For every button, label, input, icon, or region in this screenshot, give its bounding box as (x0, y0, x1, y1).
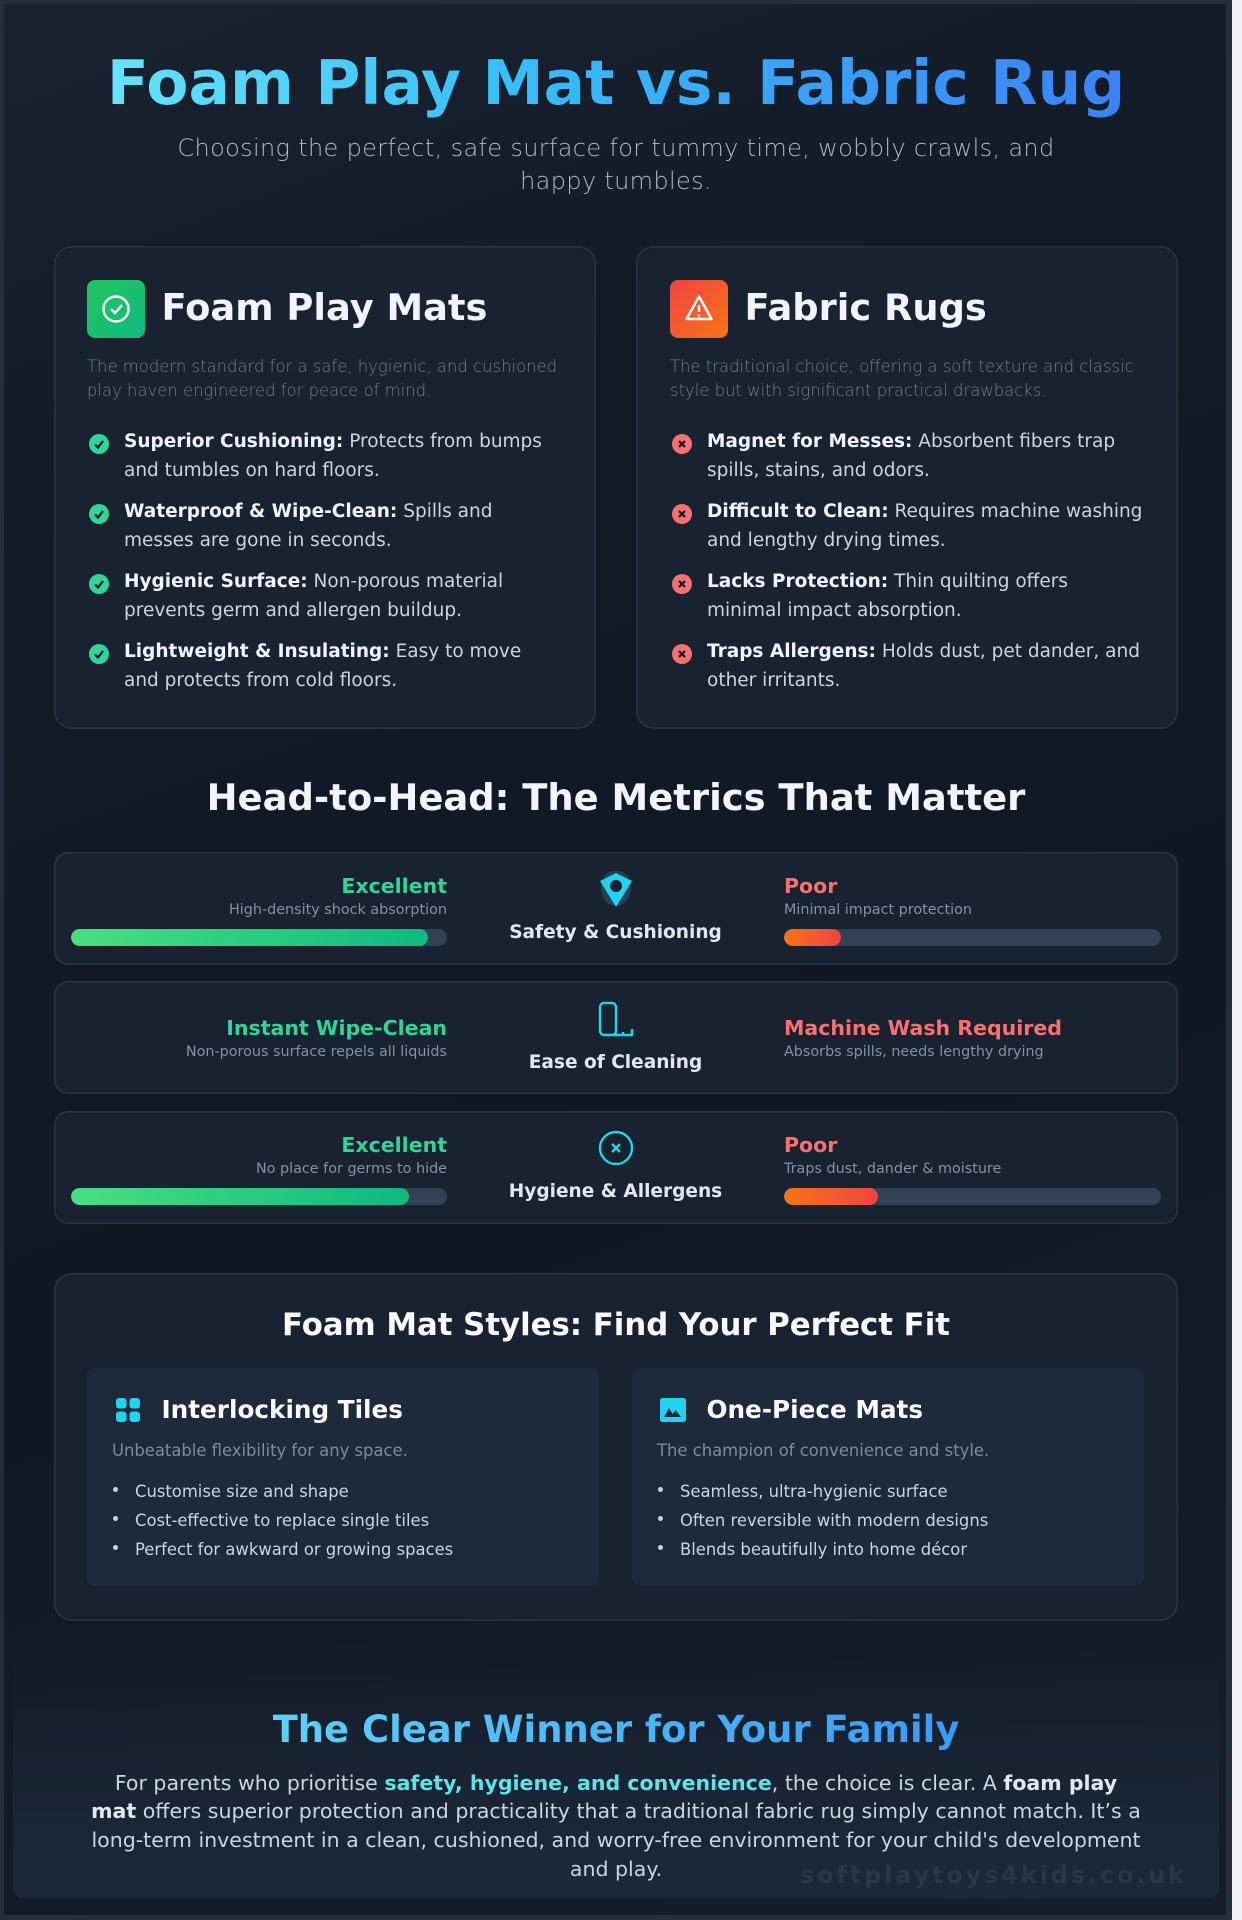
drawback: magnet for messes: spills, stains, and odors. (707, 460, 930, 481)
drawback: difficult to clean (672, 501, 1142, 551)
style title: One-Piece Mats (706, 1395, 923, 1424)
description: style but with significant practical drawbacks. (670, 381, 1047, 400)
icon: picture (660, 1398, 686, 1422)
foam bar (71, 1188, 447, 1205)
drawback: magnet for messes (672, 431, 1115, 481)
heading: styles: Foam Mat Styles: Find Your Perfect Fit (282, 1307, 950, 1343)
rug rating: Poor (784, 874, 837, 898)
metric row: safety and cushioning (54, 852, 1178, 965)
style feature list (680, 1482, 988, 1559)
panel: conclusion background (13, 1640, 1219, 1898)
drawback: traps allergens: other irritants. (707, 670, 840, 691)
metric row: ease of cleaning (54, 981, 1178, 1094)
heading: head-to-head: Head-to-Head: The Metrics That Matter (207, 776, 1025, 819)
benefit: waterproof (89, 501, 492, 551)
heading: conclusion: The Clear Winner for Your Family (273, 1708, 959, 1751)
style title: Interlocking Tiles (162, 1395, 403, 1424)
style bullet markers (658, 1487, 663, 1550)
conclusion text: For parents who prioritise safety, hygiene, and convenience, the choice is clear. A foam play (115, 1770, 1117, 1794)
icon: shield (600, 871, 632, 907)
style feature list (135, 1482, 453, 1559)
description: play haven engineered for peace of mind. (87, 381, 431, 400)
heading: fabric rugs: Fabric Rugs (744, 286, 987, 329)
description (670, 357, 1134, 400)
rug detail: Minimal impact protection (784, 902, 972, 918)
style feature list: Perfect for awkward or growing spaces (135, 1540, 453, 1559)
metric row: hygiene and allergens (54, 1111, 1178, 1224)
rug detail: Traps dust, dander & moisture (784, 1161, 1001, 1177)
watermark: softplaytoys4kids.co.uk (800, 1861, 1187, 1889)
drawback: traps allergens: Traps Allergens: Holds dust, pet dander, and (707, 641, 1140, 662)
subtitle: happy tumbles. (520, 167, 712, 195)
description: The modern standard for a safe, hygienic, and cushioned (87, 357, 557, 376)
drawback: magnet for messes: Magnet for Messes: Absorbent fibers trap (707, 431, 1115, 452)
metric label: Hygiene & Allergens (509, 1181, 722, 1202)
benefit: superior cushioning: Superior Cushioning: Protects from bumps (124, 431, 542, 452)
conclusion text: and play. (570, 1857, 662, 1881)
benefit: waterproof: messes are gone in seconds. (124, 530, 392, 551)
rug rating: Machine Wash Required (784, 1016, 1062, 1040)
benefit: lightweight (89, 641, 521, 691)
subtitle (177, 134, 1055, 195)
metric label: Safety & Cushioning (509, 922, 722, 943)
style description: Unbeatable flexibility for any space. (112, 1441, 408, 1460)
description: The traditional choice, offering a soft texture and classic (670, 357, 1134, 376)
benefit: superior cushioning (89, 431, 542, 481)
sub-panel: one-piece mats (632, 1368, 1144, 1586)
style description: The champion of convenience and style. (657, 1441, 989, 1460)
icon: wipe (598, 1002, 634, 1036)
foam rating: Excellent (341, 1133, 447, 1157)
drawback: difficult to clean: Difficult to Clean: Requires machine washing (707, 501, 1142, 522)
drawback: lacks protection (672, 571, 1068, 621)
style bullet markers (113, 1487, 118, 1550)
icon: warning badge (670, 280, 728, 338)
drawback: traps allergens (672, 641, 1140, 691)
foam rating: Excellent (341, 874, 447, 898)
icon: tile grid (116, 1398, 140, 1422)
heading: foam play mats: Foam Play Mats (162, 286, 487, 329)
drawback: difficult to clean: and lengthy drying times. (707, 530, 946, 551)
style feature list: Blends beautifully into home décor (680, 1540, 967, 1559)
panel: foam mat styles (54, 1273, 1178, 1621)
rug rating: Poor (784, 1133, 837, 1157)
style feature list: Seamless, ultra-hygienic surface (680, 1482, 948, 1501)
panel: foam play mats (54, 246, 596, 729)
benefit: lightweight: and protects from cold floors. (124, 670, 397, 691)
foam detail: No place for germs to hide (256, 1161, 447, 1177)
icon: circled x (598, 1130, 634, 1166)
foam detail: Non-porous surface repels all liquids (186, 1044, 447, 1060)
benefit: hygienic surface (89, 571, 503, 621)
metric label: Ease of Cleaning (529, 1052, 702, 1073)
foam detail: High-density shock absorption (229, 902, 447, 918)
style feature list: Often reversible with modern designs (680, 1511, 988, 1530)
foam rating: Instant Wipe-Clean (226, 1016, 447, 1040)
title: Foam Play Mat vs. Fabric Rug (107, 48, 1125, 119)
sub-panel: interlocking tiles (87, 1368, 599, 1586)
conclusion text: long-term investment in a clean, cushioned, and worry-free environment for your child's development (91, 1828, 1141, 1852)
style feature list: Customise size and shape (135, 1482, 349, 1501)
benefit: hygienic surface: Hygienic Surface: Non-porous material (124, 571, 503, 592)
benefit: hygienic surface: prevents germ and allergen buildup. (124, 600, 462, 621)
rug bar (784, 1188, 1161, 1205)
conclusion text (91, 1770, 1141, 1881)
drawback: lacks protection: minimal impact absorption. (707, 600, 962, 621)
benefit: lightweight: Lightweight & Insulating: Easy to move (124, 641, 521, 662)
panel: fabric rugs (636, 246, 1178, 729)
conclusion text: mat offers superior protection and practicality that a traditional fabric rug simply cannot match. It’s a (91, 1799, 1141, 1823)
style feature list: Cost-effective to replace single tiles (135, 1511, 429, 1530)
foam bar (71, 929, 447, 946)
description (87, 357, 557, 400)
rug detail: Absorbs spills, needs lengthy drying (784, 1044, 1044, 1060)
drawback: lacks protection: Lacks Protection: Thin quilting offers (707, 571, 1068, 592)
benefit: waterproof: Waterproof & Wipe-Clean: Spills and (124, 501, 492, 522)
subtitle: Choosing the perfect, safe surface for tummy time, wobbly crawls, and (177, 134, 1055, 162)
icon: check badge (87, 280, 145, 338)
rug bar (784, 929, 1161, 946)
benefit: superior cushioning: and tumbles on hard floors. (124, 460, 380, 481)
